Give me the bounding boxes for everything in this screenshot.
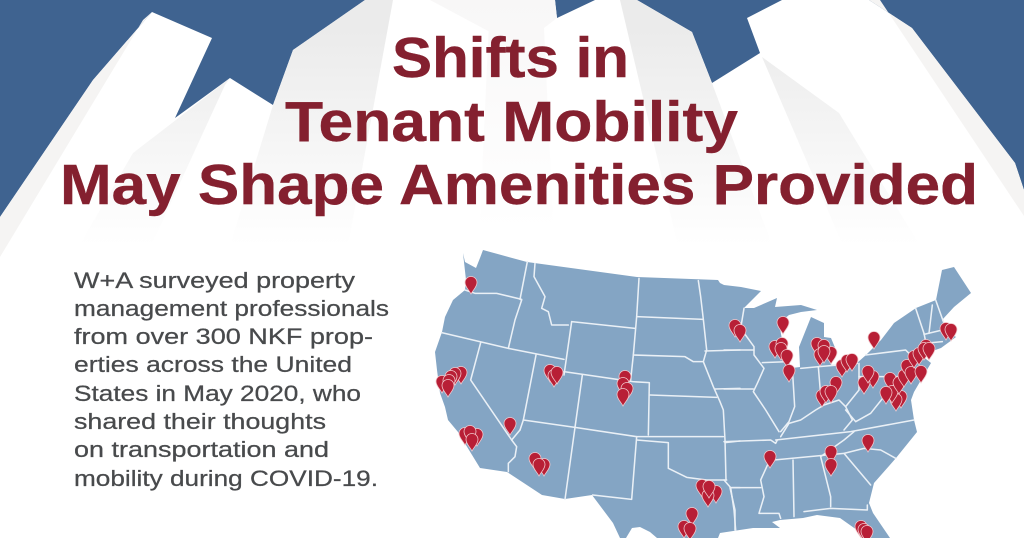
title: Shifts in	[392, 26, 629, 90]
intro text block: management professionals	[74, 296, 389, 321]
intro text block: States in May 2020, who	[74, 381, 361, 406]
title	[60, 26, 978, 217]
intro text block: from over 300 NKF prop-	[74, 324, 373, 349]
intro text block: on transportation and	[74, 437, 329, 462]
US map	[435, 250, 971, 538]
western state borders	[442, 262, 740, 530]
intro text block: mobility during COVID-19.	[74, 466, 378, 491]
property location pins	[436, 276, 957, 538]
title: Tenant Mobility	[285, 90, 738, 154]
map land silhouette	[435, 250, 971, 538]
intro text block: W+A surveyed property	[74, 268, 355, 293]
title: May Shape Amenities Provided	[60, 153, 978, 217]
intro text block	[74, 268, 389, 491]
intro text block: erties across the United	[74, 352, 352, 377]
intro text block: shared their thoughts	[74, 409, 326, 434]
eastern state borders	[724, 300, 944, 530]
